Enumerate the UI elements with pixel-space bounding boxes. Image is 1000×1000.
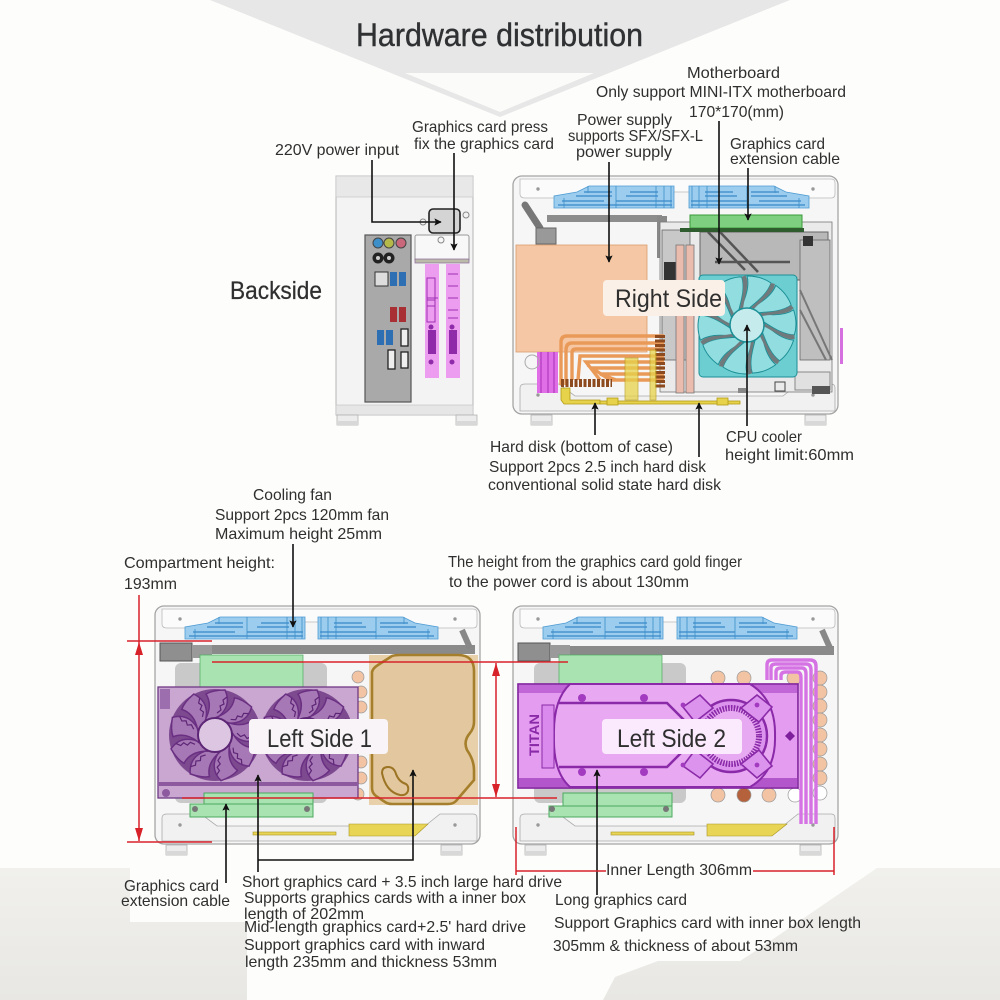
yellow hard disk rails <box>611 824 787 836</box>
text: long graphics card <box>553 892 861 955</box>
cooling fans <box>543 617 797 639</box>
label: Right Side: Right Side <box>615 285 722 313</box>
arrow: hard disk 1 <box>594 403 596 435</box>
dimension: compartment height <box>127 595 212 842</box>
case bottom band <box>336 405 473 415</box>
text: 220V power input: 220V power input <box>275 142 400 159</box>
label: Right Side <box>603 280 725 316</box>
text: left extension cable <box>121 878 230 910</box>
RAM slots <box>676 245 694 393</box>
label: Left Side 1: Left Side 1 <box>267 725 372 753</box>
capacitor circles <box>711 671 827 802</box>
arrow: power supply <box>608 162 610 262</box>
arrow: hard disk 2 <box>698 403 700 457</box>
heading: Backside: Backside <box>230 277 322 305</box>
arrow: long graphics card <box>596 770 598 895</box>
text: motherboard <box>596 65 846 121</box>
text: left extension cable: Graphics card <box>124 878 219 895</box>
text: graphics card extension cable <box>730 136 840 168</box>
feet <box>337 415 477 425</box>
text: graphics card press: Graphics card press <box>412 119 548 136</box>
yellow hard disk cables <box>561 350 740 405</box>
text: short and mid-length graphics card <box>242 874 562 971</box>
text: graphics card press: fix the graphics card <box>414 136 554 153</box>
short graphics card <box>158 687 358 798</box>
top green board <box>200 655 303 688</box>
gray tray <box>534 663 686 803</box>
arrow: cooling fan <box>292 544 294 627</box>
case body <box>336 176 473 415</box>
label: Left Side 2 <box>602 719 742 754</box>
case frame <box>513 606 838 844</box>
panel: backside view <box>336 176 477 425</box>
case frame <box>155 606 480 844</box>
bottom green extension board <box>190 793 313 817</box>
feet <box>531 415 826 425</box>
text: short and mid-length graphics card: Mid-length graphics card+2.5' hard drive <box>244 919 526 936</box>
arrow: motherboard <box>718 121 720 264</box>
text: motherboard: Motherboard <box>687 65 780 82</box>
text: inner length: Inner Length 306mm <box>606 862 752 879</box>
text: graphics card extension cable: extension cable <box>730 151 840 168</box>
long graphics card <box>518 684 798 788</box>
text: power supply: Power supply <box>577 112 672 129</box>
text: power supply: power supply <box>576 144 672 161</box>
motherboard parts <box>660 222 843 394</box>
panel: left side 1 view <box>155 606 480 855</box>
arrow: graphics card extension cable <box>747 168 749 220</box>
text: power supply <box>568 112 703 161</box>
text: compartment height <box>124 555 275 593</box>
graphics card extension cable <box>680 215 804 232</box>
top green board <box>559 655 662 685</box>
graphics card slots <box>425 264 460 378</box>
text: gold finger height <box>448 554 743 591</box>
text: CPU cooler <box>725 429 854 464</box>
magenta riser cable <box>525 352 558 393</box>
arrow: graphics card press <box>453 153 455 250</box>
text: power supply: supports SFX/SFX-L <box>568 128 703 145</box>
text: hard disk <box>488 439 722 494</box>
heat pipes <box>561 335 664 388</box>
arrow: CPU cooler <box>746 325 748 426</box>
feet <box>525 845 821 855</box>
text: short and mid-length graphics card: Supports graphics cards with a inner box <box>244 890 526 907</box>
CPU cooler <box>693 271 801 379</box>
magenta riser cable <box>767 660 816 824</box>
text: gold finger height: The height from the graphics card gold finger <box>448 554 743 571</box>
panel: right side view <box>513 176 843 425</box>
text: cooling fan: Support 2pcs 120mm fan <box>215 507 389 524</box>
gray tray <box>175 663 327 803</box>
power socket <box>420 209 469 233</box>
I/O panel <box>365 235 411 402</box>
text: compartment height: Compartment height: <box>124 555 275 572</box>
text: long graphics card: Long graphics card <box>555 892 687 909</box>
text: compartment height: 193mm <box>124 576 177 593</box>
hard drive <box>369 655 478 805</box>
text: short and mid-length graphics card: Support graphics card with inward <box>244 937 485 954</box>
cooling fans <box>554 186 809 208</box>
text: graphics card extension cable: Graphics card <box>730 136 825 153</box>
text: CPU cooler: CPU cooler <box>726 429 803 446</box>
text: gold finger height: to the power cord is about 130mm <box>449 574 689 591</box>
power supply <box>516 245 647 352</box>
text: hard disk: Hard disk (bottom of case) <box>490 439 673 456</box>
text: hard disk: conventional solid state hard disk <box>488 477 722 494</box>
long graphics card: TITAN <box>526 714 542 756</box>
title: Hardware distribution <box>356 17 643 53</box>
case frame <box>513 176 838 414</box>
text: motherboard: 170*170(mm) <box>689 104 784 121</box>
text: cooling fan <box>215 487 389 543</box>
dimension: inner length <box>516 827 834 875</box>
yellow hard disk rails <box>253 824 428 836</box>
label: Left Side 2: Left Side 2 <box>617 725 726 753</box>
feet <box>166 845 462 855</box>
top rod <box>160 630 475 661</box>
text: long graphics card: Support Graphics card with inner box length <box>554 915 861 932</box>
text: graphics card press <box>412 119 554 153</box>
arrow: left graphics card extension cable <box>225 804 227 883</box>
arrow: large hard drive <box>258 770 413 860</box>
arrow: 220V power input <box>372 160 441 222</box>
text: cooling fan: Cooling fan <box>253 487 332 504</box>
text: cooling fan: Maximum height 25mm <box>215 526 382 543</box>
graphics card press bracket <box>415 235 469 263</box>
text: left extension cable: extension cable <box>121 893 230 910</box>
case top band <box>336 176 473 197</box>
cooling fans <box>185 617 438 639</box>
top rod <box>518 630 834 661</box>
text: CPU cooler: height limit:60mm <box>725 447 854 464</box>
panel: left side 2 view <box>513 606 838 855</box>
bottom green extension board <box>549 793 672 817</box>
text: short and mid-length graphics card: length 235mm and thickness 53mm <box>245 954 497 971</box>
text: long graphics card: 305mm & thickness of about 53mm <box>553 938 798 955</box>
top rod and bracket <box>525 205 667 258</box>
text: short and mid-length graphics card: length of 202mm <box>244 906 364 923</box>
heat pipe circles <box>352 671 367 800</box>
text: short and mid-length graphics card: Short graphics card + 3.5 inch large hard drive <box>242 874 562 891</box>
text: motherboard: Only support MINI-ITX motherboard <box>596 84 846 101</box>
text: hard disk: Support 2pcs 2.5 inch hard disk <box>489 459 707 476</box>
dimension: gold finger to power cord <box>182 662 568 798</box>
label: Left Side 1 <box>249 719 388 754</box>
arrow: short graphics card <box>257 775 259 872</box>
